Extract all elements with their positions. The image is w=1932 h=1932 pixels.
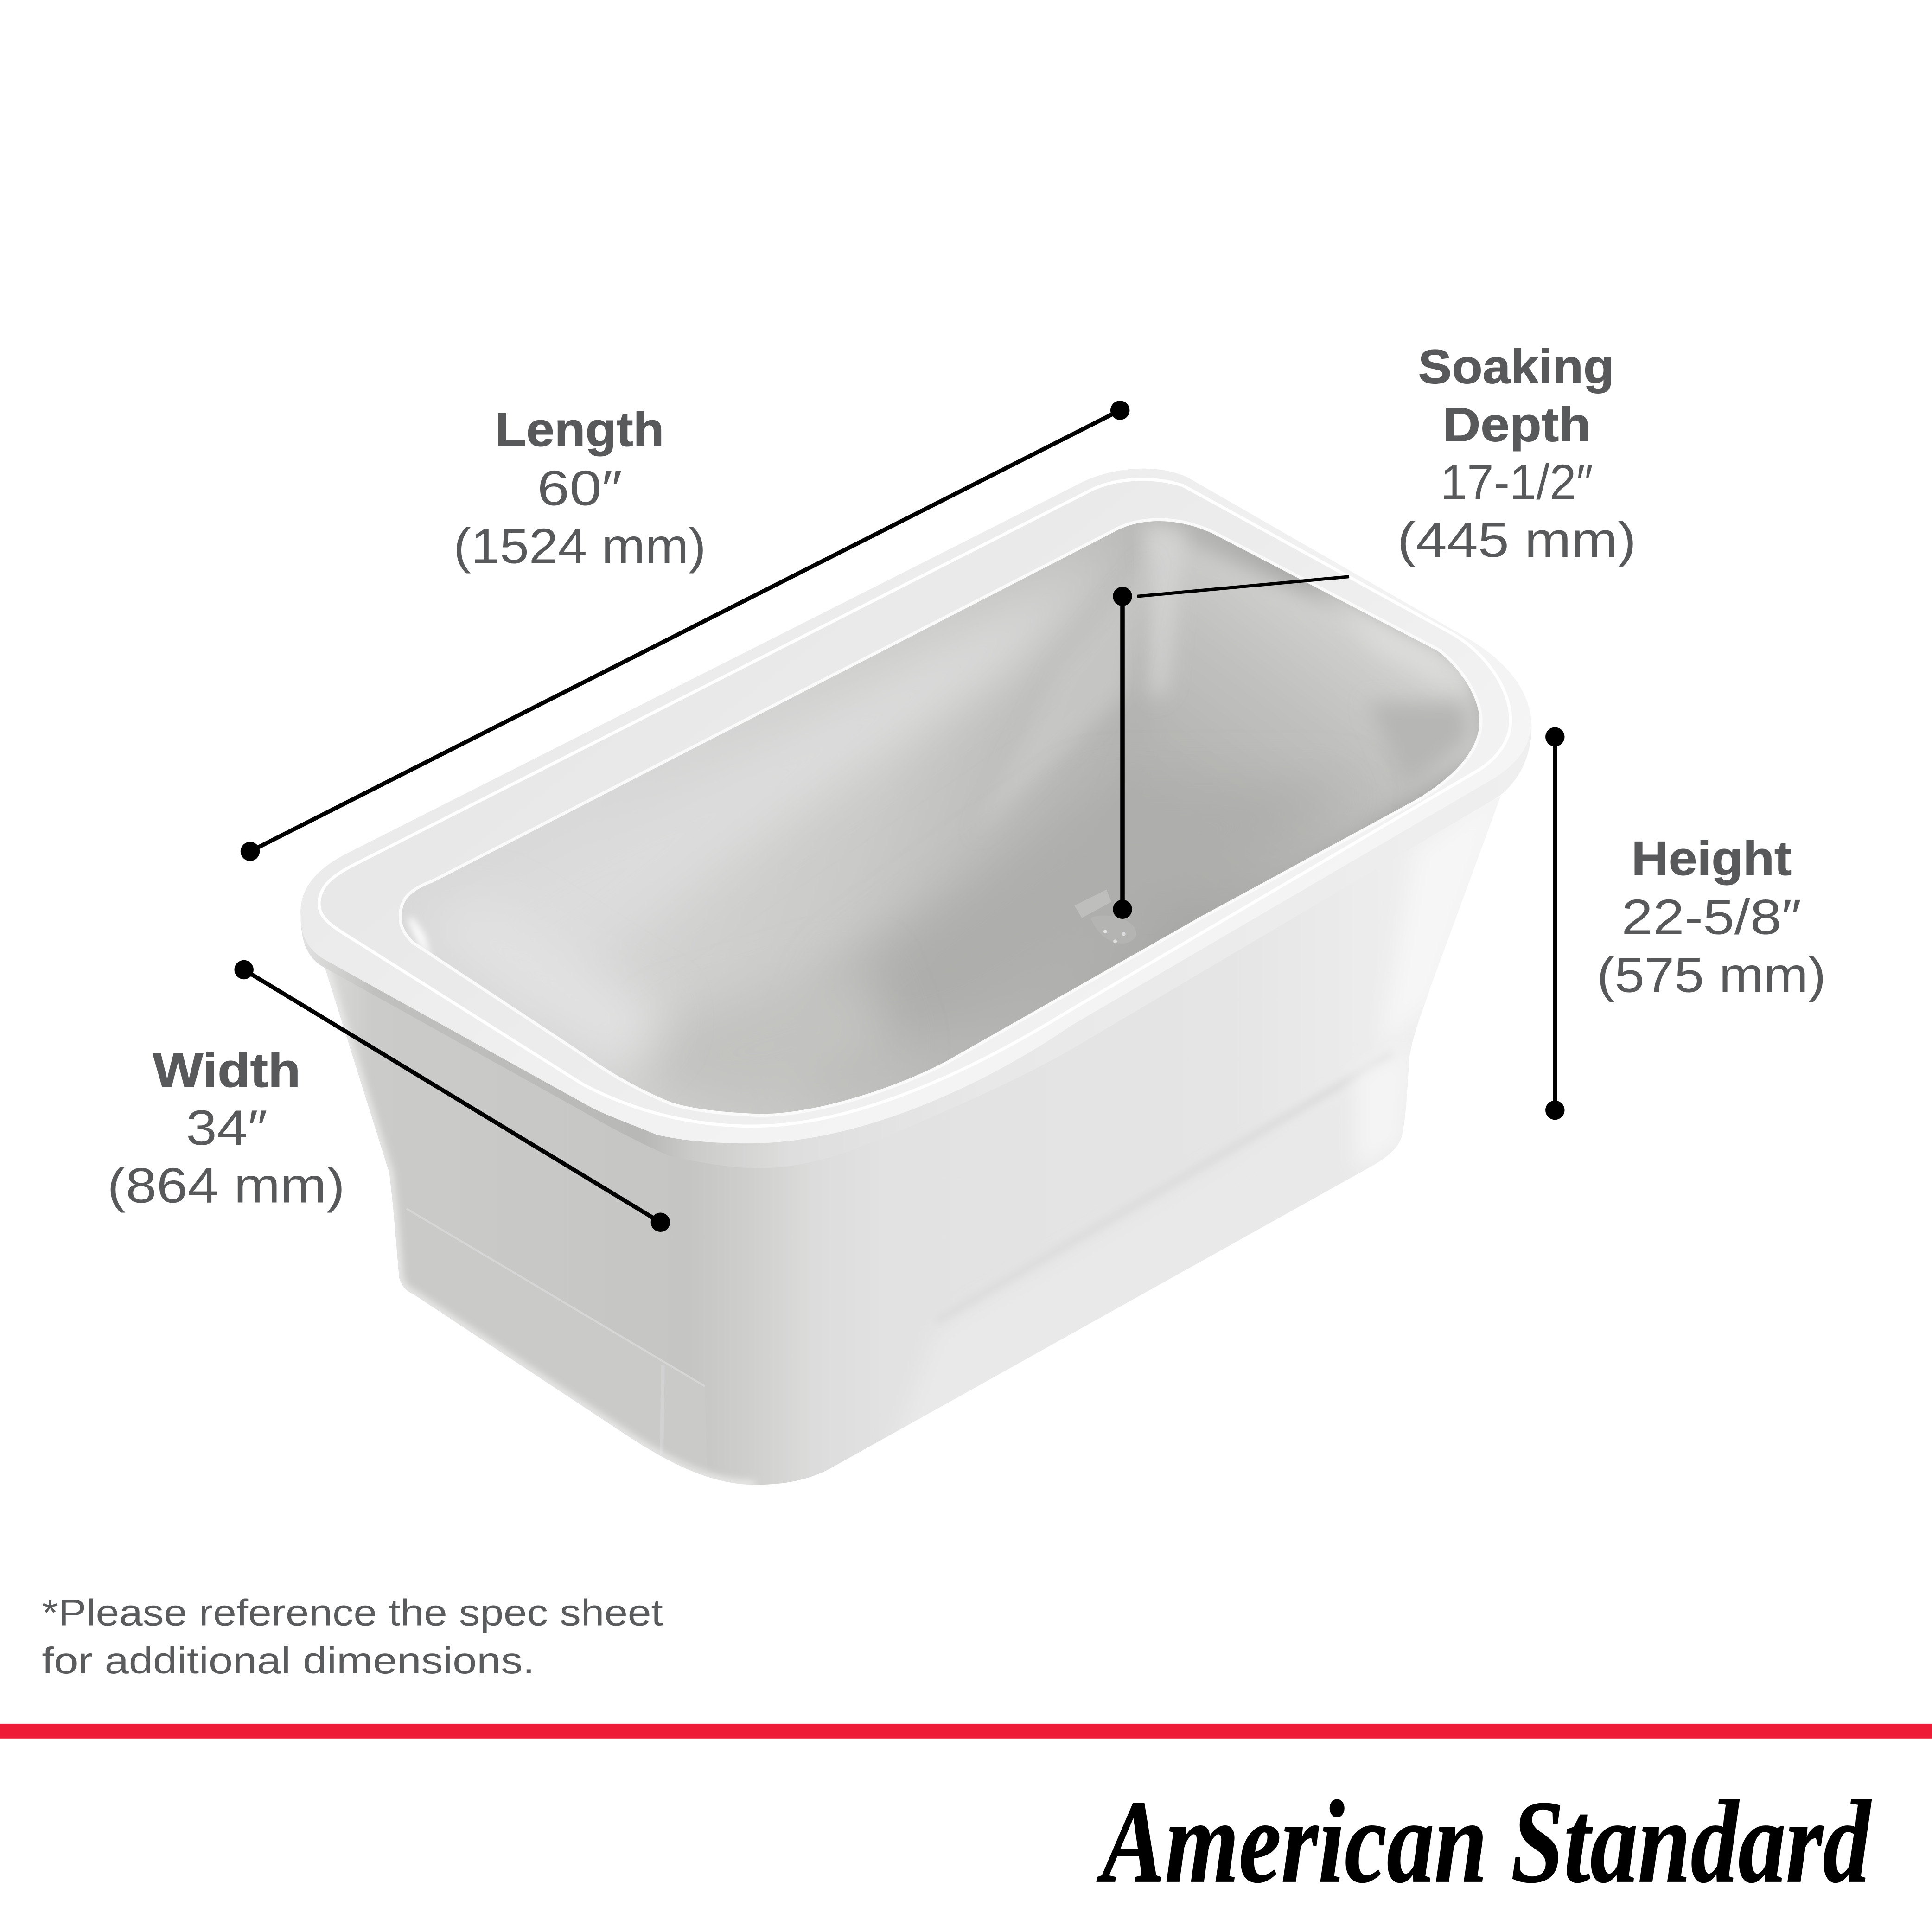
label: width: 34″ <box>186 1100 268 1155</box>
label: soaking depth: Soaking <box>1418 339 1614 393</box>
footnote <box>42 1592 663 1681</box>
red divider bar <box>0 1724 1932 1739</box>
footnote: *Please reference the spec sheet <box>42 1592 663 1633</box>
label: length: (1524 mm) <box>453 518 706 574</box>
bathtub illustration <box>300 469 1531 1485</box>
label: soaking depth: (445 mm) <box>1397 512 1636 567</box>
label: length <box>453 402 706 574</box>
tub body <box>323 796 1501 1485</box>
label: width: Width <box>153 1043 300 1097</box>
footnote: for additional dimensions. <box>42 1640 535 1681</box>
label: height <box>1597 831 1826 1002</box>
dimension line: width <box>234 960 670 1232</box>
label: height: 22-5/8″ <box>1621 889 1801 944</box>
dimension line: length <box>241 401 1129 861</box>
label: height: (575 mm) <box>1597 947 1826 1002</box>
label: soaking depth: Depth <box>1443 397 1591 451</box>
label: length: 60″ <box>537 461 622 516</box>
label: width <box>107 1043 345 1213</box>
dimension line: height <box>1545 727 1565 1120</box>
label: height: Height <box>1632 831 1792 885</box>
dimension line: soaking depth <box>1113 577 1349 919</box>
label: soaking depth: 17-1/2″ <box>1441 454 1593 510</box>
drain <box>1074 890 1136 944</box>
tub bowl interior <box>400 520 1485 1116</box>
label: width: (864 mm) <box>107 1158 345 1213</box>
label: length: Length <box>495 402 664 456</box>
label: soaking depth <box>1397 339 1636 567</box>
tub rim <box>300 469 1531 1168</box>
